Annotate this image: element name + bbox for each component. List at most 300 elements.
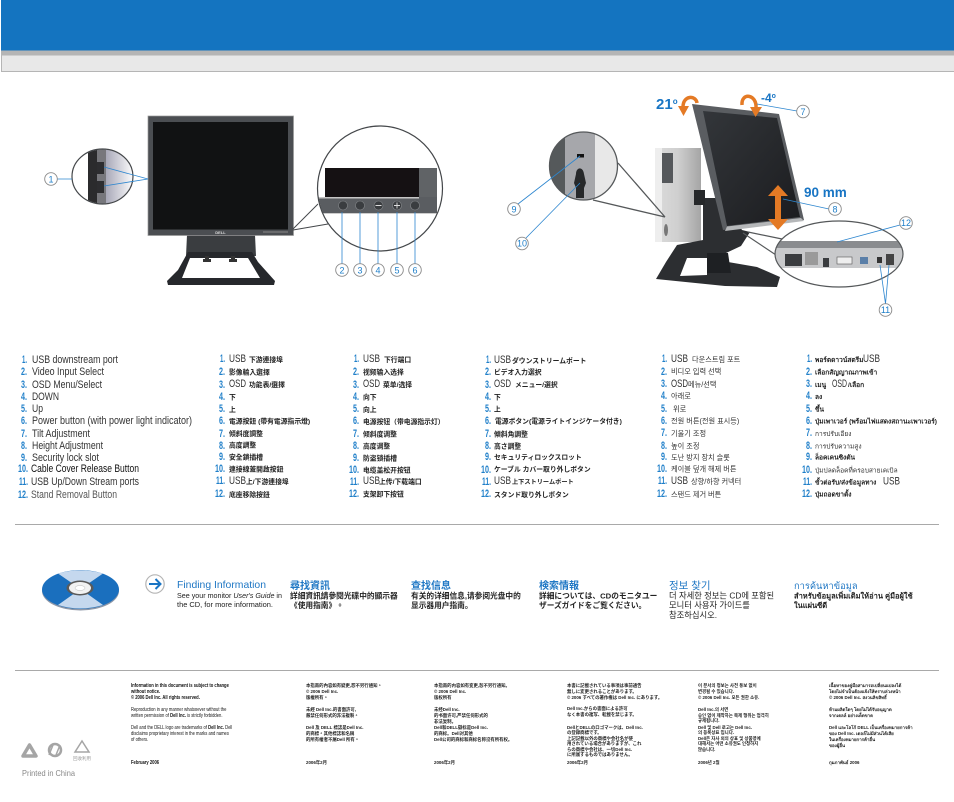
legal: Thai: ของ Dell Inc. เดลล์ไม่มีส่วนได้เสีย <box>829 730 894 736</box>
icon: CD disc <box>42 570 119 610</box>
finding information: Korean: 모니터 사용자 가이드를 <box>669 600 750 610</box>
callout 3: 3 <box>357 265 363 275</box>
callout 4: 4 <box>375 265 381 275</box>
callout 8 <box>829 203 841 215</box>
parts list: English: Height Adjustment <box>32 440 103 452</box>
legal: English: Dell and the DELL logo are trademarks of Dell Inc. Dell <box>131 725 232 730</box>
magnifier: front panel buttons <box>316 126 442 251</box>
parts list: Japanese: 6. <box>485 415 491 427</box>
parts list: Thai: 3. <box>806 378 812 390</box>
magnifier: USB ports <box>57 149 148 205</box>
callout 7 <box>797 105 809 118</box>
parts list: Korean: 높이 조정 <box>671 442 699 450</box>
parts list: Thai <box>802 353 937 500</box>
icon: arrow in circle <box>146 575 164 593</box>
parts list: Thai: การปรับเอียง <box>815 430 851 438</box>
legal: Korean: Dell은 자사 외의 상표 및 상품명에 <box>698 735 761 742</box>
parts list: Korean: 기울기 조정 <box>671 429 706 438</box>
recycling icons <box>23 741 91 762</box>
callout connector lines <box>293 204 328 230</box>
parts list: Japanese: 9. <box>485 451 491 463</box>
parts list: Korean: USB <box>671 353 688 365</box>
finding information: Traditional Chinese: 《使用指南》。 <box>290 600 344 610</box>
legal: Traditional Chinese: 嚴禁任何形式的非法複製。 <box>306 712 359 719</box>
label: 90 mm: 90 mm <box>804 185 847 200</box>
legal: Traditional Chinese: 版權所有。 <box>306 694 328 701</box>
height arrow <box>768 185 788 230</box>
parts list: Traditional Chinese: 8. <box>219 440 225 452</box>
legal: Traditional Chinese <box>306 682 382 766</box>
parts list: Japanese: USB <box>494 354 511 366</box>
parts list: Korean: 위로 <box>673 404 687 414</box>
parts list: Simplified Chinese: 6. <box>353 415 359 427</box>
finding information: Traditional Chinese <box>290 579 398 610</box>
parts list: English: Security lock slot <box>32 452 99 464</box>
legal: Simplified Chinese: 的书面许可,严禁任何形式的 <box>434 712 489 719</box>
parts list: Simplified Chinese: 7. <box>353 428 359 440</box>
parts list: Thai: ลง <box>815 394 822 401</box>
parts list: Traditional Chinese: 3. <box>219 379 225 391</box>
callout 4 <box>372 264 384 276</box>
legal: Korean: 의 등록상표 입니다. <box>698 729 734 736</box>
finding information: Simplified Chinese: 显示器用户指南。 <box>411 600 473 610</box>
stand <box>656 190 780 287</box>
legal: Traditional Chinese: © 2006 Dell Inc. <box>306 689 338 694</box>
parts list: English: Video Input Select <box>32 366 104 378</box>
parts list: Japanese: 8. <box>485 440 491 452</box>
parts list: Japanese: 上 <box>494 404 501 414</box>
parts list: English: 10. <box>18 463 28 475</box>
finding information: Japanese: 詳細については、CDのモニタユー <box>539 590 657 600</box>
legal: Korean: © 2006 Dell Inc. 모든 권한 소유. <box>698 694 759 701</box>
parts list: Traditional Chinese: 12. <box>215 488 225 500</box>
parts list: Korean: 4. <box>661 390 667 402</box>
parts list: Simplified Chinese: 电源按钮（带电源指示灯） <box>363 417 445 426</box>
front panel button row <box>338 201 420 264</box>
finding information: Korean: 정보 찾기 <box>669 580 711 592</box>
parts list: English: 3. <box>21 379 27 391</box>
parts list: Simplified Chinese: 电缆盖松开按钮 <box>363 466 411 474</box>
tilted monitor <box>692 104 804 231</box>
parts list: Japanese: USB <box>494 475 511 487</box>
parts list: Simplified Chinese: USB <box>363 475 380 487</box>
parts list: Korean: 케이블 덮개 해제 버튼 <box>671 464 737 474</box>
parts list: Korean: 11. <box>658 475 667 487</box>
callout 5 <box>391 264 403 276</box>
parts list: Simplified Chinese <box>349 353 445 500</box>
parts list: Simplified Chinese: 菜单/选择 <box>383 380 412 389</box>
legal: Thai: ของผู้อื่น <box>829 742 845 749</box>
divider <box>15 670 939 671</box>
parts list: Korean: 다운스트림 포트 <box>692 355 741 364</box>
parts list: Japanese: 電源ボタン(電源ライトインジケータ付き) <box>495 416 622 426</box>
parts list: English: 8. <box>21 440 27 452</box>
parts list: Simplified Chinese: 向下 <box>363 392 377 402</box>
parts list: Korean: 12. <box>657 488 667 500</box>
parts list: Thai: พอร์ตดาวน์สตรีม <box>815 356 864 364</box>
parts list: English: 6. <box>21 415 27 427</box>
parts list: English: Stand Removal Button <box>31 489 117 501</box>
legal: Simplified Chinese: Dell和DELL徽标是Dell Inc. <box>434 724 488 731</box>
legal: Korean: 2006년 2월 <box>698 759 720 766</box>
parts list: Korean <box>657 353 741 500</box>
finding information: Simplified Chinese: 有关的详细信息,请参阅光盘中的 <box>411 590 521 600</box>
parts list: Traditional Chinese: 5. <box>219 403 225 415</box>
legal: English: Information in this document is subject to change <box>131 683 229 688</box>
parts list: Simplified Chinese: 2. <box>353 366 359 378</box>
legal: English: without notice. <box>130 689 160 694</box>
parts list: Traditional Chinese: 上/下游連接埠 <box>246 477 289 486</box>
parts list: Traditional Chinese: 底座移除按鈕 <box>229 490 270 499</box>
parts list: Traditional Chinese: 10. <box>215 463 225 475</box>
header blue band <box>1 0 954 50</box>
printed in china: Printed in China <box>22 768 75 778</box>
parts list: Japanese: 4. <box>485 391 491 403</box>
label: 21 degrees: 21 <box>656 96 673 113</box>
parts list: Korean: OSD <box>671 378 688 390</box>
legal: Japanese: © 2006 すべての著作権は Dell Inc. にあります。 <box>567 694 662 701</box>
parts list: Simplified Chinese: 上传/下载端口 <box>379 477 422 486</box>
callout 11 <box>879 304 892 316</box>
parts list: Traditional Chinese: 7. <box>219 428 225 440</box>
parts list: English: 9. <box>21 452 27 464</box>
finding information: Thai: ในแผ่นซีดี <box>794 601 827 610</box>
parts list: Korean: 1. <box>662 353 667 365</box>
callout 1: 1 <box>48 174 54 184</box>
parts list: English: 12. <box>18 489 28 501</box>
parts list: English: 1. <box>22 354 27 366</box>
callout 10 <box>516 237 528 250</box>
parts list: English: Tilt Adjustment <box>32 428 90 440</box>
parts list: English: 5. <box>21 403 27 415</box>
parts list: Thai: USB <box>883 476 900 488</box>
parts list: Korean: 비디오 입력 선택 <box>671 367 721 376</box>
parts list: Korean: 전원 버튼(전원 표시등) <box>671 416 739 426</box>
legal: Korean: 변경될 수 있습니다. <box>698 688 734 695</box>
parts list: English: 11. <box>19 476 28 488</box>
parts list: Korean: 메뉴/선택 <box>688 380 716 389</box>
legal: Simplified Chinese: 的商标。Dell对其他 <box>434 730 473 737</box>
parts list: Japanese: 12. <box>481 488 491 500</box>
parts list: Thai: 9. <box>806 451 812 463</box>
computer tower <box>655 148 701 242</box>
legal: Traditional Chinese: 未經 Dell Inc.的書面許可, <box>306 706 356 713</box>
legal: Thai <box>828 681 913 766</box>
legal: Simplified Chinese: 非法复制。 <box>434 718 456 725</box>
parts list: Japanese: 3. <box>485 379 491 391</box>
parts list: Traditional Chinese: 11. <box>216 475 225 487</box>
parts list: Korean: 스탠드 제거 버튼 <box>671 490 722 499</box>
legal: Traditional Chinese: 的所有權者不屬Dell 所有。 <box>306 736 359 743</box>
finding information: Thai <box>794 581 913 610</box>
finding information: Japanese: ザーズガイドをご覧ください。 <box>539 600 646 610</box>
tilt arrow right <box>742 96 762 117</box>
parts list: Thai: ขึ้น <box>815 404 825 414</box>
parts list: Thai: ปุ่มปลดล็อคที่ครอบสายเคเบิล <box>815 466 898 474</box>
finding information: Korean <box>669 580 774 620</box>
parts list: Korean: 7. <box>661 427 667 439</box>
legal: Korean: Dell 및 Dell 로고는 Dell Inc. <box>698 724 752 731</box>
legal: Traditional Chinese: 本指南的內容如有變更,恕不另行通知。 <box>306 682 382 689</box>
legal: English: Reproduction in any manner whatsoever without the <box>131 707 227 712</box>
parts list: Simplified Chinese: 5. <box>353 403 359 415</box>
legal: Japanese: 無しに変更されることがあります。 <box>567 688 637 695</box>
parts list: Simplified Chinese: 下行端口 <box>384 355 411 364</box>
legal: Thai: © 2006 Dell Inc. สงวนลิขสิทธิ์ <box>829 693 888 700</box>
parts list: Simplified Chinese: USB <box>363 353 380 365</box>
finding information: Japanese <box>539 579 657 610</box>
side view monitor diagram <box>508 91 912 316</box>
parts list: Thai: ปุ่มเพาเวอร์ (พร้อมไฟแสดงสถานะเพาเวอร์) <box>815 416 937 426</box>
parts list: Simplified Chinese: 9. <box>353 452 359 464</box>
legal: English <box>130 683 232 765</box>
callout 1 <box>45 173 57 185</box>
callout 5: 5 <box>394 265 400 275</box>
parts list: Thai: เลือกสัญญาณภาพเข้า <box>815 368 877 376</box>
parts list: English: DOWN <box>32 391 59 403</box>
parts list: English <box>18 354 192 501</box>
parts list: Korean: 10. <box>657 463 667 475</box>
parts list: Thai: ขั้วต่อรับ/ส่งข้อมูลทาง <box>815 476 876 488</box>
legal: Korean: 대해서는 어떤 소유권도 인정하지 <box>698 740 758 747</box>
finding information: Thai: สำหรับข้อมูลเพิ่มเติมให้อ่าน คู่มือผู้ใช้ <box>794 590 913 602</box>
legal: Korean: 규제됩니다. <box>698 717 719 724</box>
parts list: English: 4. <box>21 391 27 403</box>
parts list: Simplified Chinese: 视频输入选择 <box>363 368 404 376</box>
divider <box>15 524 939 525</box>
parts list: Korean: 도난 방지 장치 슬롯 <box>671 453 730 462</box>
legal: Japanese: 上記記載以外の商標や会社名が使 <box>567 735 633 742</box>
parts list: Japanese: ケーブル カバー取り外しボタン <box>494 464 591 474</box>
finding information: English: See your monitor User's Guide in <box>177 591 282 600</box>
parts list: Simplified Chinese: 3. <box>353 379 359 391</box>
parts list: English: 7. <box>21 428 27 440</box>
callout 2: 2 <box>339 265 345 275</box>
parts list: Japanese: 5. <box>485 403 491 415</box>
legal: Japanese: 本書に記載されている事項は事前通告 <box>567 682 642 689</box>
parts list: Thai: การปรับความสูง <box>815 442 862 450</box>
header grey bar <box>1 50 954 72</box>
parts list: Traditional Chinese: 4. <box>219 391 225 403</box>
parts list: Simplified Chinese: 倾斜度调整 <box>363 430 397 438</box>
legal: Traditional Chinese: Dell 及 DELL 標誌是Dell Inc. <box>306 724 364 731</box>
parts list: Traditional Chinese: 1. <box>220 353 225 365</box>
parts list: Korean: 아래로 <box>671 392 691 400</box>
callout 10: 10 <box>517 238 527 248</box>
legal: English: written permission of Dell Inc. is strictly forbidden. <box>131 713 222 718</box>
legal: Korean: Dell Inc.의 서면 <box>698 706 728 713</box>
legal: Japanese: の登録商標です。 <box>567 729 602 736</box>
parts list: Simplified Chinese: 10. <box>349 464 359 476</box>
parts list: Japanese: スタンド取り外しボタン <box>494 490 569 499</box>
parts list: Traditional Chinese: 連接線蓋開啟按鈕 <box>229 464 284 474</box>
parts list: Japanese: 11. <box>482 476 491 488</box>
parts list: Thai: 4. <box>806 390 812 402</box>
parts list: Thai: 10. <box>802 464 812 476</box>
callout 12 <box>900 217 912 229</box>
legal: Simplified Chinese: 2006年2月 <box>434 759 455 766</box>
parts list: Traditional Chinese: USB <box>229 353 246 365</box>
parts list: Japanese: 10. <box>481 464 491 476</box>
parts list: Thai: OSD <box>832 378 847 390</box>
finding information: Simplified Chinese <box>411 579 521 610</box>
parts list: Thai: 11. <box>803 476 812 488</box>
parts list: Traditional Chinese: 9. <box>219 451 225 463</box>
parts list: Japanese: 上下ストリームポート <box>512 478 574 486</box>
legal: Thai: ห้ามผลิตใดๆ โดยไม่ได้รับอนุญาต <box>829 706 892 713</box>
parts list: Simplified Chinese: 向上 <box>363 405 377 414</box>
legal: Japanese: DellとDELLのロゴマークは、Dell Inc. <box>567 724 643 731</box>
parts list: Thai: ปุ่มถอดขาตั้ง <box>815 488 851 498</box>
callout 9: 9 <box>511 204 517 214</box>
finding information: English: Finding Information <box>177 579 266 591</box>
monitor front: DELL <box>215 230 226 235</box>
parts list: Traditional Chinese: 功能表/選擇 <box>249 380 285 389</box>
legal: Simplified Chinese: 未经Dell Inc. <box>434 706 460 713</box>
parts list: Korean: 2. <box>661 366 667 378</box>
magnifier: rear connectors <box>743 221 903 304</box>
legal: Japanese: 2006年2月 <box>567 759 588 766</box>
legal: Japanese: 用されている場合がありますが、これ <box>567 740 642 747</box>
parts list: Traditional Chinese: 2. <box>219 366 225 378</box>
parts list: Japanese: 7. <box>485 428 491 440</box>
parts list: Japanese: 2. <box>485 366 491 378</box>
parts list: Thai: 8. <box>806 440 812 452</box>
parts list: Thai: 2. <box>806 366 812 378</box>
parts list: Traditional Chinese: 6. <box>219 415 225 427</box>
finding information: Korean: 참조하십시오. <box>669 610 717 620</box>
finding information: Thai: การค้นหาข้อมูล <box>794 581 858 592</box>
parts list: Traditional Chinese: 下游連接埠 <box>249 355 283 364</box>
parts list: Japanese: ビデオ入力選択 <box>494 368 542 376</box>
parts list: Thai: เมนู <box>815 382 827 390</box>
finding information: English: the CD, for more information. <box>177 600 273 609</box>
parts list: Thai: 12. <box>802 488 812 500</box>
legal: English: © 2006 Dell Inc. All rights reserved. <box>131 694 200 700</box>
legal: Korean <box>698 682 769 766</box>
magnifier: lock slot <box>518 132 665 238</box>
parts list: Japanese: ダウンストリームポート <box>512 356 586 365</box>
tilt arrow left <box>678 97 697 116</box>
parts list: Simplified Chinese: 4. <box>353 391 359 403</box>
parts list: English: OSD Menu/Select <box>32 379 102 391</box>
callout 9 <box>508 203 520 215</box>
parts list: Traditional Chinese: 高度調整 <box>229 440 256 450</box>
pointer lines <box>757 104 829 209</box>
parts list: Thai: 1. <box>807 353 812 365</box>
parts list: Thai: USB <box>863 353 880 365</box>
legal: Japanese: なく本書の複写、転載を禁じます。 <box>567 711 637 718</box>
parts list: Japanese <box>481 354 622 500</box>
legal: Traditional Chinese: 2006年2月 <box>306 759 327 766</box>
legal: Korean: 이 문서의 정보는 사전 통보 없이 <box>698 682 757 689</box>
parts list: Traditional Chinese: 下 <box>229 394 236 402</box>
parts list: Thai: ล็อคเคนซิงตัน <box>815 452 856 462</box>
callout 8: 8 <box>832 204 838 214</box>
parts list: Simplified Chinese: 支架卸下按钮 <box>363 490 404 498</box>
recycling icons: 回收利用 <box>73 755 91 762</box>
front view monitor diagram <box>45 116 442 285</box>
callout 7: 7 <box>800 107 806 117</box>
parts list: Korean: 6. <box>661 415 667 427</box>
parts list: Korean: 5. <box>661 403 667 415</box>
parts list: Simplified Chinese: 防盗锁插槽 <box>363 454 397 462</box>
legal: Thai: โดยไม่จำเป็นต้องแจ้งให้ทราบล่วงหน้า <box>828 687 901 694</box>
parts list: Traditional Chinese: 影像輸入選擇 <box>229 368 270 376</box>
legal: Thai: กุมภาพันธ์ 2006 <box>829 759 860 766</box>
parts list: Japanese: 高さ調整 <box>494 442 521 450</box>
finding information: Korean: 더 자세한 정보는 CD에 포함된 <box>669 590 774 600</box>
legal: Japanese <box>567 682 662 766</box>
parts list: Traditional Chinese: OSD <box>229 378 246 390</box>
parts list: Japanese: 傾斜角調整 <box>494 430 528 438</box>
legal: English: disclaims proprietary interest in the marks and names <box>131 731 230 736</box>
parts list: Korean: 3. <box>661 378 667 390</box>
callout 11: 11 <box>881 305 890 315</box>
legal: Thai: เนื้อหาของคู่มือสามารถเปลี่ยนแปลงได้ <box>829 681 901 689</box>
finding information: Traditional Chinese: 詳細資訊請參閱光碟中的顯示器 <box>290 590 398 600</box>
parts list: Traditional Chinese: 電源按鈕 (帶有電源指示燈) <box>229 416 310 426</box>
parts list: Simplified Chinese: OSD <box>363 378 380 390</box>
legal: Simplified Chinese: Dell公司的商标和商标名称没有所有权。 <box>434 736 512 743</box>
callout 3 <box>354 264 366 276</box>
parts list: English: USB Up/Down Stream ports <box>31 476 139 488</box>
parts list: Simplified Chinese: 高度调整 <box>363 442 390 450</box>
legal: English: of others. <box>131 737 148 742</box>
parts list: Simplified Chinese: 1. <box>354 353 359 365</box>
legal: Thai: Dell และโลโก้ DELL เป็นเครื่องหมายการค้า <box>829 723 913 730</box>
parts list: Japanese: メニュー/選択 <box>515 380 558 389</box>
parts list: Simplified Chinese: 8. <box>353 440 359 452</box>
parts list: Thai: 6. <box>806 415 812 427</box>
callout 12: 12 <box>901 218 911 228</box>
parts list: Traditional Chinese: USB <box>229 475 246 487</box>
parts list: English: 2. <box>21 366 27 378</box>
parts list: Traditional Chinese <box>215 353 310 500</box>
parts list: Japanese: セキュリティロックスロット <box>494 452 582 462</box>
legal: Thai: ในเครื่องหมายการค้าอื่น <box>829 736 875 742</box>
legal: Simplified Chinese: 本指南的内容如有变更,恕不另行通知。 <box>434 682 510 689</box>
parts list: Japanese: 下 <box>494 394 501 402</box>
legal: Korean: 승인 없이 제작하는 복제 행위는 엄격히 <box>698 712 769 719</box>
parts list: Traditional Chinese: 傾斜度調整 <box>229 429 263 438</box>
parts list: English: Cable Cover Release Button <box>31 463 139 475</box>
parts list: English: Power button (with power light indicator) <box>32 415 192 427</box>
parts list: Simplified Chinese: 12. <box>349 488 359 500</box>
label: 21 degrees: o <box>673 97 678 106</box>
legal: Japanese: らの商標や会社は、一切Dell Inc. <box>567 746 632 753</box>
parts list: Traditional Chinese: 安全鎖插槽 <box>229 452 263 462</box>
monitor front <box>148 116 294 236</box>
parts list: Korean: 9. <box>661 451 667 463</box>
parts list: Thai: 5. <box>806 403 812 415</box>
parts list: Traditional Chinese: 上 <box>229 405 236 414</box>
legal: Simplified Chinese <box>434 682 512 766</box>
legal: Korean: 않습니다. <box>698 746 715 753</box>
callout 2 <box>336 264 348 276</box>
parts list: English: USB downstream port <box>32 354 118 366</box>
finding information: English <box>177 579 282 609</box>
legal: Traditional Chinese: 的商標。其他標誌和名稱 <box>306 730 355 737</box>
callout 6 <box>409 264 421 276</box>
finding information: Japanese: 検索情報 <box>539 579 579 592</box>
parts list: Japanese: 1. <box>486 354 491 366</box>
parts list: Korean: USB <box>671 475 688 487</box>
legal: Japanese: に所属するものではありません。 <box>567 751 633 758</box>
finding information: Simplified Chinese: 查找信息 <box>411 579 451 592</box>
parts list: English: Up <box>32 403 43 415</box>
legal: Simplified Chinese: © 2006 Dell Inc. <box>434 689 466 694</box>
